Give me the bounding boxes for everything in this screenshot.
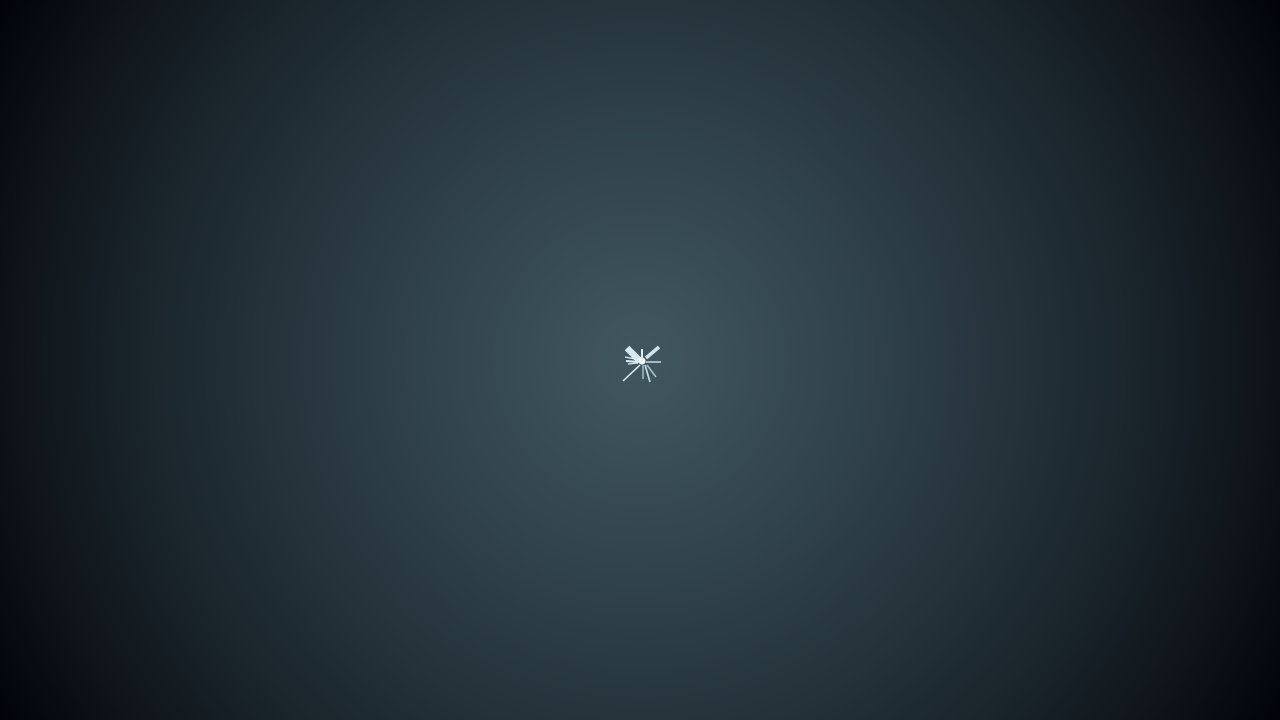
icon: mosquito bbox=[622, 346, 661, 382]
